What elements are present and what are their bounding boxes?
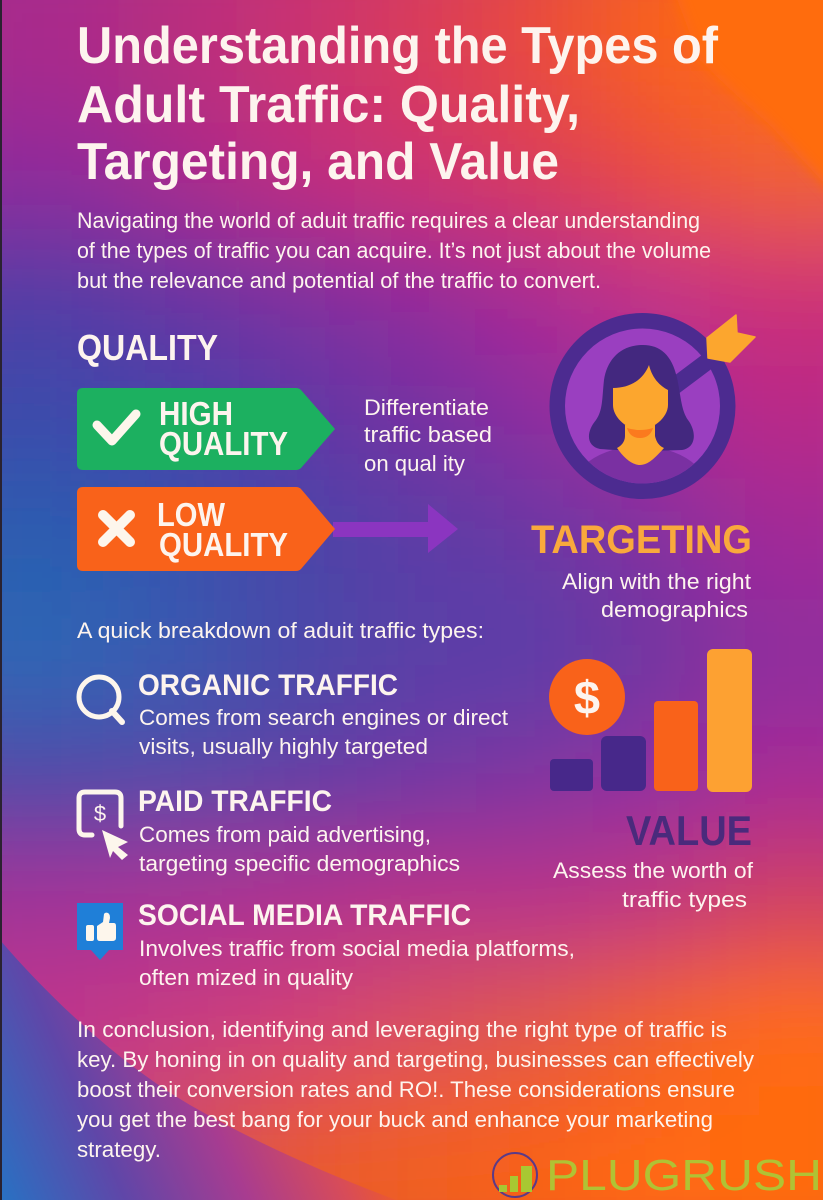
intro paragraph: Navigating the world of aduit traffic requires a clear understanding bbox=[77, 208, 700, 233]
conclusion paragraph: you get the best bang for your buck and enhance your marketing bbox=[77, 1107, 713, 1132]
heading: quality: QUALITY bbox=[77, 327, 218, 368]
targeting description: Align with the right bbox=[562, 569, 751, 594]
quality description bbox=[364, 395, 492, 476]
targeting description: demographics bbox=[601, 597, 748, 622]
value description bbox=[553, 858, 754, 912]
badge: low quality bbox=[77, 487, 335, 571]
icon: paid click: $ bbox=[94, 801, 106, 826]
intro paragraph bbox=[77, 208, 711, 293]
heading: targeting: TARGETING bbox=[531, 518, 752, 562]
conclusion paragraph: In conclusion, identifying and leveraging the right type of traffic is bbox=[77, 1017, 727, 1042]
value description: traffic types bbox=[622, 887, 747, 912]
conclusion paragraph: strategy. bbox=[77, 1137, 161, 1162]
item: social media traffic: Involves traffic from social media platforms, bbox=[139, 936, 575, 961]
title: Adult Traffic: Quality, bbox=[77, 76, 580, 134]
icon: cross bbox=[103, 515, 130, 542]
chart: value bars: $ bbox=[574, 671, 600, 724]
high quality label: HIGH bbox=[159, 395, 233, 432]
low quality label: QUALITY bbox=[159, 526, 288, 563]
breakdown intro: A quick breakdown of aduit traffic types: bbox=[77, 618, 484, 643]
icon: social like bbox=[77, 903, 123, 960]
quality description: traffic based bbox=[364, 422, 492, 447]
item: social media traffic: SOCIAL MEDIA TRAFFIC bbox=[138, 899, 471, 932]
item: paid traffic bbox=[138, 785, 460, 876]
value description: Assess the worth of bbox=[553, 858, 754, 883]
logo: plugrush: PLUGRUSH bbox=[546, 1151, 822, 1200]
chart: value bars bbox=[549, 649, 752, 792]
badge: high quality bbox=[77, 388, 335, 470]
item: paid traffic: Comes from paid advertising, bbox=[139, 822, 431, 847]
title: Understanding the Types of bbox=[77, 17, 719, 75]
item: social media traffic bbox=[138, 899, 575, 990]
item: organic traffic: Comes from search engines or direct bbox=[139, 705, 508, 730]
low quality label: LOW bbox=[157, 496, 226, 533]
item: paid traffic: PAID TRAFFIC bbox=[138, 785, 332, 818]
icon: paid click bbox=[79, 792, 128, 860]
arrow: low quality to targeting bbox=[333, 504, 458, 553]
item: organic traffic bbox=[138, 669, 508, 759]
item: paid traffic: targeting specific demographics bbox=[139, 851, 460, 876]
intro paragraph: of the types of traffic you can acquire. It’s not just about the volume bbox=[77, 238, 711, 263]
low quality label bbox=[157, 496, 288, 563]
heading: value: VALUE bbox=[626, 807, 752, 854]
title: Targeting, and Value bbox=[77, 133, 559, 191]
high quality label: QUALITY bbox=[159, 425, 288, 462]
targeting description bbox=[562, 569, 751, 622]
intro paragraph: but the relevance and potential of the traffic to convert. bbox=[77, 268, 601, 293]
icon: check mark bbox=[97, 414, 136, 441]
high quality label bbox=[159, 395, 288, 462]
quality description: Differentiate bbox=[364, 395, 489, 420]
conclusion paragraph: boost their conversion rates and RO!. These considerations ensure bbox=[77, 1077, 735, 1102]
icon: targeting bbox=[550, 313, 756, 499]
quality description: on qual ity bbox=[364, 451, 465, 476]
conclusion paragraph: key. By honing in on quality and targeting, businesses can effectively bbox=[77, 1047, 754, 1072]
item: social media traffic: often mized in quality bbox=[139, 965, 353, 990]
title bbox=[77, 17, 719, 191]
icon: magnifier bbox=[79, 677, 122, 722]
conclusion paragraph bbox=[77, 1017, 754, 1162]
item: organic traffic: visits, usually highly targeted bbox=[139, 734, 428, 759]
item: organic traffic: ORGANIC TRAFFIC bbox=[138, 669, 398, 702]
